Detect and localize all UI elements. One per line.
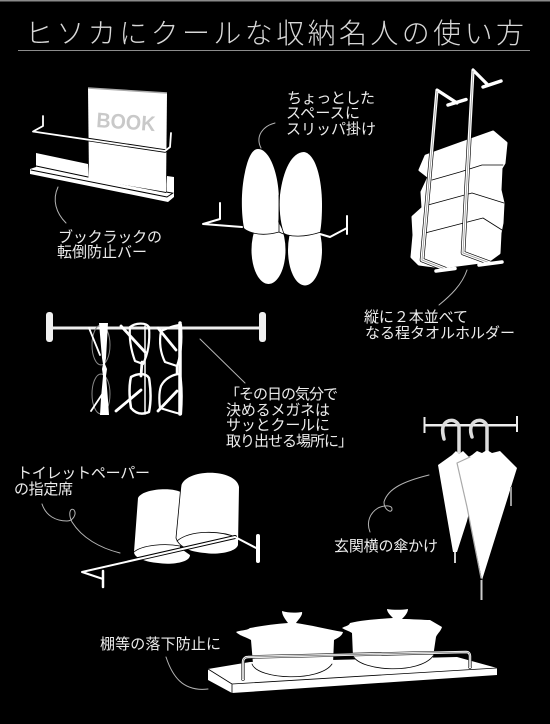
panel: umbrellas [424,416,518,600]
icon: upper slippers [242,149,322,236]
icon: umbrella handles [443,420,487,452]
panel: book rack [30,88,174,202]
icon: umbrella rail [424,416,518,433]
panel: slippers [203,149,347,286]
icon: glasses 2 [116,324,150,414]
icon: glasses 3 [158,323,182,414]
book [88,88,167,192]
label: glasses: 「その日の気分で [225,386,338,403]
callout leader: slippers [259,123,275,148]
label: slippers: スペースに [286,105,360,122]
label: umbrellas: 玄関横の傘かけ [334,538,438,555]
callout leader: toilet paper [42,504,120,553]
icon: shelf board [208,657,497,693]
label: toilet paper: の指定席 [14,481,73,498]
icon: lower slippers [252,214,322,286]
label: glasses: サッとクールに [226,417,330,434]
icon: slipper bar [203,203,347,237]
title: ヒソカにクールな収納名人の使い方 [25,18,524,49]
label: towel holder: 縦に２本並べて [364,309,468,326]
label: slippers: ちょっとした [287,90,375,107]
panel: toilet paper [82,473,258,587]
callout leader: shelf [166,657,208,689]
label: toilet paper: トイレットペーパー [17,465,150,482]
label: glasses: 取り出せる場所に」 [226,433,353,450]
icon: right rod [463,70,502,265]
label: slippers: スリッパ掛け [286,121,376,138]
icon: paper bar [82,536,258,587]
icon: umbrella 2 [457,450,517,600]
icon: pot 2 [342,609,442,670]
icon: pot 1 [236,611,343,677]
label: book rack: 転倒防止バー [57,244,147,261]
icon: guard bar [243,652,470,679]
callout leader: umbrellas [368,475,429,532]
icon: right roll [176,473,239,554]
callout leader: book rack [55,187,66,223]
ledge of the book rack [30,153,174,202]
panel: towel holder [412,70,506,271]
panel: shelf with pots [208,609,497,693]
label: towel holder: なる程タオルホルダー [365,325,515,342]
icon: left roll [134,489,190,564]
label: glasses: 決めるメガネは [226,402,330,419]
callout leader: glasses [200,339,245,383]
book: BOOK [96,109,156,136]
icon: left rod [422,90,466,271]
label: book rack: ブックラックの [58,228,162,246]
icon: hanging rod with clips [46,312,266,342]
icon: umbrella 1 [438,451,472,563]
callout leader: towel holder [439,270,467,305]
icon: towel stack [412,132,506,267]
icon: anti-topple bar [33,116,171,151]
label: shelf: 棚等の落下防止に [100,635,221,653]
icon: glasses 1 [89,323,110,415]
panel: glasses [46,312,266,415]
